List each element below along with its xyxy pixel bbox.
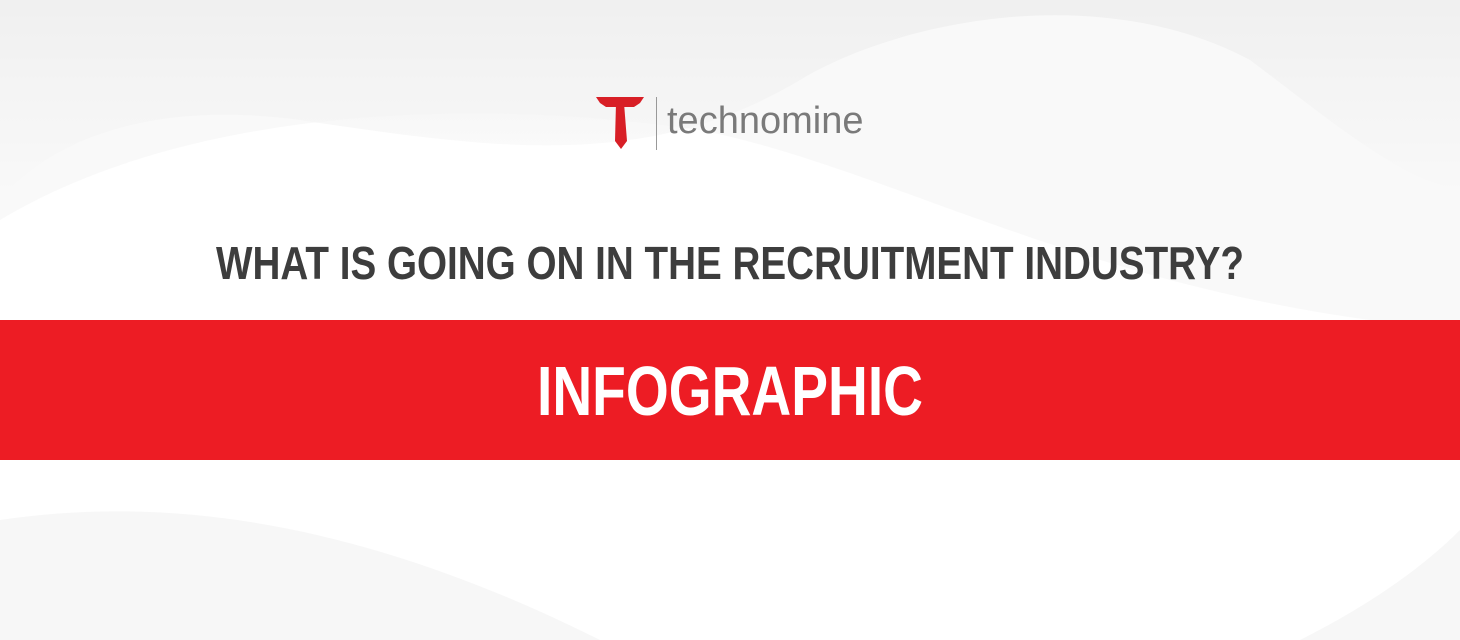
- logo: [596, 97, 863, 150]
- logo: technomine: [667, 100, 863, 142]
- red banner: [0, 320, 1460, 460]
- title: WHAT IS GOING ON IN THE RECRUITMENT INDUSTRY?: [216, 237, 1244, 289]
- icon: T tie: [596, 97, 644, 149]
- banner heading: INFOGRAPHIC: [537, 352, 923, 430]
